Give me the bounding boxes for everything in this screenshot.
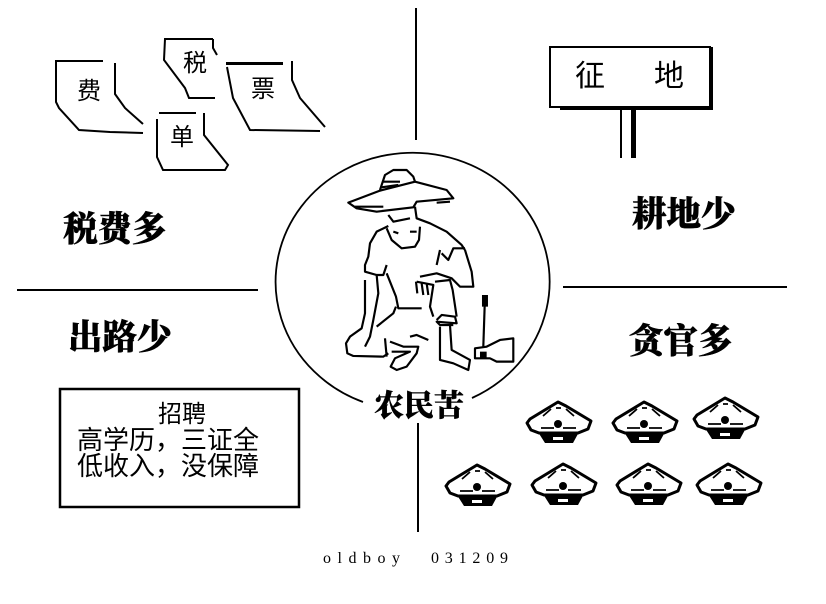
signature [323, 550, 508, 567]
icon: official cap [613, 402, 677, 443]
job advertisement box: 招聘 [158, 401, 206, 428]
icon: official cap [532, 464, 596, 505]
center emblem: suffering farmer [276, 153, 550, 423]
icon: ticket slip: 票 [251, 76, 275, 103]
panel: requisitioned land [550, 47, 739, 234]
icon: land requisition sign: 地 [654, 60, 684, 93]
job advertisement box: 低收入，没保障 [77, 451, 259, 481]
icon: fee slip [56, 61, 143, 133]
icon: fee slip: 费 [77, 78, 101, 105]
icon: bill slip: 单 [170, 124, 194, 151]
icon: official cap [694, 398, 758, 439]
heading: little farmland: 耕地少 [632, 196, 739, 234]
icon: tax slip: 税 [183, 50, 207, 77]
icon: official cap [527, 402, 591, 443]
circle frame [276, 153, 550, 402]
job advertisement box [60, 389, 299, 507]
icon: land requisition sign [550, 47, 713, 158]
illustration: seated farmer with hoe [346, 170, 513, 370]
panel: corrupt officials [446, 322, 761, 506]
job advertisement box: 高学历，三证全 [77, 425, 259, 455]
icon: land requisition sign: 征 [575, 60, 605, 93]
signature: 031209 [431, 550, 508, 567]
heading: few ways out: 出路少 [68, 319, 175, 357]
panel: taxes and fees [56, 39, 325, 249]
signature: oldboy [323, 550, 400, 567]
icon: official cap [446, 465, 510, 506]
heading: many taxes and fees: 税费多 [63, 211, 166, 249]
icon: official cap [617, 464, 681, 505]
icon: ticket slip [226, 61, 325, 131]
icon: tax slip [164, 39, 217, 98]
icon: official cap [697, 464, 761, 505]
icon: bill slip [157, 113, 228, 170]
heading: many corrupt officials: 贪官多 [629, 322, 732, 361]
label: farmers' suffering: 农民苦 [373, 390, 464, 423]
panel: few ways out [60, 319, 299, 507]
